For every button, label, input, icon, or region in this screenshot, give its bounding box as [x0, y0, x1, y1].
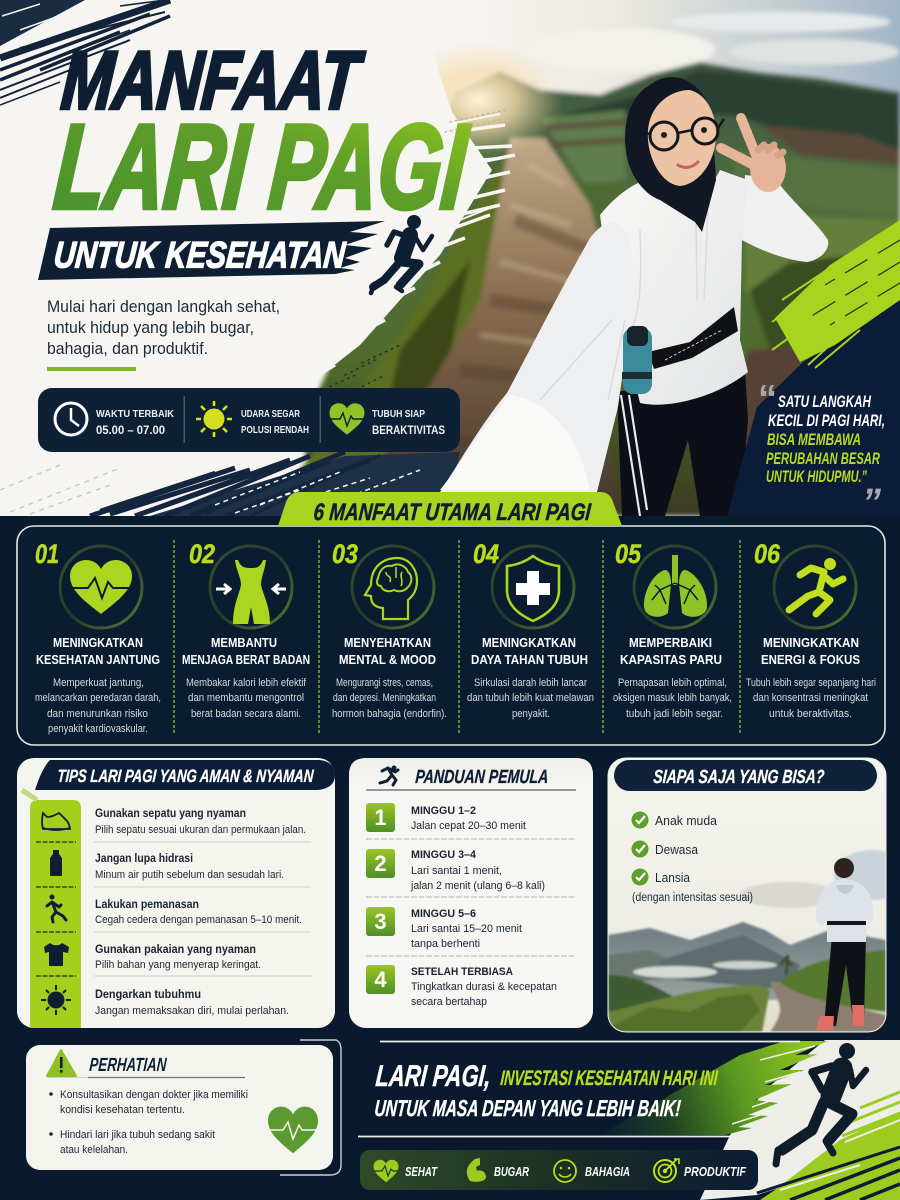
benefit 05: oksigen masuk lebih banyak, — [613, 692, 732, 704]
ribbon heading: 6 MANFAAT UTAMA LARI PAGI — [312, 499, 593, 526]
hero quote: ” — [862, 482, 881, 524]
step 2: MINGGU 3–4 — [411, 849, 477, 861]
benefit 03: Mengurangi stres, cemas, — [336, 677, 433, 689]
check item: lansia — [632, 868, 753, 904]
benefit 04 — [467, 539, 594, 720]
benefit 03: dan depresi. Meningkatkan — [333, 692, 436, 704]
benefit 04: Sirkulasi darah lebih lancar — [474, 677, 587, 689]
benefit 03: hormon bahagia (endorfin). — [332, 708, 447, 720]
check item: lansia: (dengan intensitas sesuai) — [632, 892, 753, 904]
panel: who can run — [608, 758, 900, 1032]
check item: anak muda: Anak muda — [655, 813, 718, 828]
step 2 — [366, 849, 545, 892]
panel: warning: PERHATIAN — [89, 1055, 168, 1076]
intro paragraph — [47, 297, 280, 358]
benefit 02: 02 — [189, 539, 215, 569]
step 3: 3 — [374, 909, 387, 934]
benefit 01 — [35, 539, 161, 735]
step 3: MINGGU 5–6 — [411, 908, 476, 920]
icon: shoe — [42, 813, 70, 830]
benefit 01: 01 — [35, 539, 59, 569]
banner: closing message — [358, 1040, 900, 1200]
tips text: Gunakan pakaian yang nyaman — [95, 942, 256, 956]
benefit 01: KESEHATAN JANTUNG — [36, 652, 160, 667]
step 4: SETELAH TERBIASA — [411, 966, 513, 978]
info bar: UDARA SEGAR — [241, 409, 301, 420]
benefit 03: MENYEHATKAN — [344, 635, 431, 650]
ribbon heading — [278, 492, 622, 526]
pill: four benefit tags — [360, 1150, 758, 1190]
step 3: tanpa berhenti — [411, 938, 480, 950]
info bar: WAKTU TERBAIK — [96, 408, 174, 420]
step 3: Lari santai 15–20 menit — [411, 923, 522, 935]
icon: green heart — [268, 1107, 318, 1153]
hero: landscape photo background — [100, 0, 900, 516]
check item: dewasa — [632, 840, 699, 858]
step 3 — [366, 907, 522, 950]
benefit 02: berat badan secara alami. — [191, 708, 301, 720]
info bar — [38, 388, 460, 452]
icon: runner — [47, 894, 66, 922]
title banner: untuk kesehatan — [38, 221, 385, 280]
warning list: Hindari lari jika tubuh sedang sakit — [60, 1129, 215, 1141]
panel: tips — [17, 758, 335, 1028]
check item: dewasa: Dewasa — [655, 842, 699, 857]
step 4 — [366, 965, 557, 1008]
hero: dark brush strokes top left — [0, 0, 170, 105]
benefit 06: untuk beraktivitas. — [769, 708, 852, 720]
benefit 06: ENERGI & FOKUS — [761, 652, 860, 667]
info bar: POLUSI RENDAH — [241, 425, 309, 436]
tips text: Dengarkan tubuhmu — [95, 987, 201, 1001]
warning list: atau kelelahan. — [60, 1144, 128, 1156]
benefit 04: MENINGKATKAN — [482, 635, 576, 650]
benefit 01: dan menurunkan risiko — [47, 708, 148, 720]
benefit 05 — [613, 539, 732, 720]
info bar: 05.00 – 07.00 — [96, 423, 165, 437]
hero quote: “ — [758, 378, 777, 420]
tag: produktif — [654, 1159, 747, 1182]
tips heading ribbon: TIPS LARI PAGI YANG AMAN & NYAMAN — [57, 766, 315, 786]
step 1: Jalan cepat 20–30 menit — [411, 820, 526, 832]
tips heading ribbon — [35, 760, 335, 790]
benefit 03 — [332, 539, 447, 720]
panel: six benefits — [17, 492, 885, 745]
tag: sehat — [374, 1160, 438, 1182]
benefit 02 — [182, 539, 310, 720]
guide heading: PANDUAN PEMULA — [415, 767, 549, 788]
warning list — [49, 1089, 248, 1156]
icon: banner runner silhouette — [776, 1043, 866, 1164]
intro paragraph: untuk hidup yang lebih bugar, — [47, 318, 254, 337]
intro paragraph: Mulai hari dengan langkah sehat, — [47, 297, 280, 316]
panel: warning — [26, 1040, 341, 1175]
info bar: TUBUH SIAP — [372, 408, 425, 420]
check item: anak muda — [632, 812, 718, 828]
benefit 05: Pernapasan lebih optimal, — [618, 677, 727, 689]
hero: woman runner taking a selfie — [440, 77, 828, 516]
who heading: SIAPA SAJA YANG BISA? — [653, 767, 825, 788]
icon: sun — [41, 985, 71, 1015]
step 2: Lari santai 1 menit, — [411, 865, 502, 877]
icon: warning triangle — [47, 1050, 76, 1076]
benefit 05: 05 — [615, 539, 642, 569]
step 1: 1 — [374, 805, 387, 830]
benefit 01: penyakit kardiovaskular. — [48, 723, 148, 735]
tag: bugar: BUGAR — [494, 1164, 529, 1179]
benefit 04: DAYA TAHAN TUBUH — [471, 652, 588, 667]
step 1: MINGGU 1–2 — [411, 805, 476, 817]
benefit 01: melancarkan peredaran darah, — [35, 692, 161, 704]
hero quote — [758, 378, 885, 524]
benefit 02: MENJAGA BERAT BADAN — [182, 652, 310, 667]
hero quote: BISA MEMBAWA — [767, 430, 861, 449]
info bar: BERAKTIVITAS — [372, 423, 445, 437]
title: lari pagi: LARI PAGI — [50, 100, 473, 234]
benefit 05: tubuh jadi lebih segar. — [626, 708, 723, 720]
who heading — [614, 760, 877, 791]
benefit 06 — [746, 539, 876, 720]
tips text — [95, 806, 306, 1017]
benefit 04: penyakit. — [512, 708, 550, 720]
benefit 01: Memperkuat jantung, — [53, 677, 144, 689]
benefit 02: MEMBANTU — [211, 635, 277, 650]
tag: bahagia: BAHAGIA — [585, 1164, 630, 1179]
closing text: UNTUK MASA DEPAN YANG LEBIH BAIK! — [374, 1095, 682, 1121]
lower stripes — [760, 1112, 900, 1200]
icon: hero runner silhouette — [371, 215, 432, 293]
step 4: 4 — [374, 967, 387, 992]
closing text: INVESTASI KESEHATAN HARI INI — [500, 1067, 719, 1090]
benefit 05: MEMPERBAIKI — [629, 635, 712, 650]
step 4: Tingkatkan durasi & kecepatan — [411, 981, 557, 993]
icon: guide runner — [380, 766, 398, 785]
benefit 02: Membakar kalori lebih efektif — [186, 677, 307, 689]
benefit 03: 03 — [332, 539, 358, 569]
benefit 05: KAPASITAS PARU — [620, 652, 722, 667]
title: manfaat: MANFAAT — [58, 36, 367, 126]
tag: bugar — [467, 1158, 529, 1182]
tips text: Minum air putih sebelum dan sesudah lari. — [95, 869, 284, 881]
warning list: Konsultasikan dengan dokter jika memiliki — [60, 1089, 248, 1101]
panel: beginner guide — [349, 758, 593, 1028]
tips text: Pilih sepatu sesuai ukuran dan permukaan jalan. — [95, 824, 306, 836]
step 1 — [366, 803, 526, 832]
hero: white brush edge over the photo — [322, 56, 516, 388]
check item: lansia: Lansia — [655, 870, 691, 885]
hero: lime brush and navy corner — [727, 220, 900, 516]
icon: shirt — [44, 943, 69, 966]
closing text — [375, 1064, 718, 1116]
icon: bottle — [50, 850, 62, 876]
benefit 06: dan konsentrasi meningkat — [753, 692, 868, 704]
closing text: LARI PAGI, — [374, 1060, 492, 1093]
tag: produktif: PRODUKTIF — [684, 1164, 747, 1179]
step 2: 2 — [374, 851, 387, 876]
benefit 01: MENINGKATKAN — [53, 635, 143, 650]
benefit 03: MENTAL & MOOD — [339, 652, 436, 667]
benefit 04: dan tubuh lebih kuat melawan — [467, 692, 594, 704]
tag: bahagia — [554, 1160, 630, 1182]
intro paragraph: bahagia, dan produktif. — [47, 339, 208, 358]
benefit 02: dan membantu mengontrol — [188, 692, 304, 704]
warning list: kondisi kesehatan tertentu. — [60, 1104, 185, 1116]
tips text: Cegah cedera dengan pemanasan 5–10 menit. — [95, 914, 302, 926]
accent bar — [47, 367, 136, 371]
benefit 06: MENINGKATKAN — [763, 635, 859, 650]
tips text: Lakukan pemanasan — [95, 897, 199, 911]
tips text: Pilih bahan yang menyerap keringat. — [95, 959, 261, 971]
benefit 06: 06 — [754, 539, 781, 569]
title banner: untuk kesehatan: UNTUK KESEHATAN — [52, 234, 348, 275]
step 4: secara bertahap — [411, 996, 487, 1008]
tips text: Jangan memaksakan diri, mulai perlahan. — [95, 1005, 289, 1017]
step 2: jalan 2 menit (ulang 6–8 kali) — [410, 880, 545, 892]
tips text: Jangan lupa hidrasi — [95, 851, 193, 865]
hero: dark brush strokes bottom — [0, 452, 460, 516]
benefit 04: 04 — [473, 539, 499, 569]
landscape scene with runner — [608, 758, 900, 1032]
tag: sehat: SEHAT — [405, 1164, 438, 1179]
tips text: Gunakan sepatu yang nyaman — [95, 806, 246, 820]
